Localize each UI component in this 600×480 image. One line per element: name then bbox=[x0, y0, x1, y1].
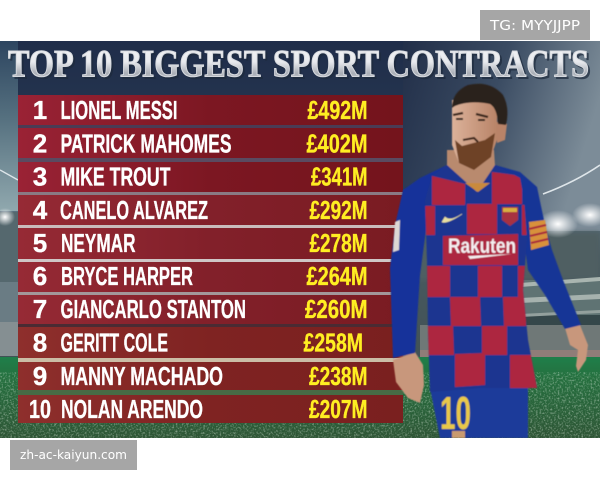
row 10 bbox=[18, 394, 403, 424]
watermark: telegram: TG: MYYJJPP bbox=[489, 19, 580, 34]
club crest bbox=[502, 207, 518, 226]
nike logo bbox=[442, 214, 462, 222]
neck bbox=[447, 150, 495, 192]
row 6: £264M bbox=[306, 261, 368, 291]
row 2 bbox=[18, 128, 403, 158]
shirt bbox=[424, 165, 538, 392]
row 10: NOLAN ARENDO bbox=[61, 394, 203, 424]
row 5 bbox=[18, 228, 403, 259]
collar bbox=[465, 183, 490, 192]
row 5: £278M bbox=[310, 228, 368, 258]
watermark: site bbox=[10, 440, 137, 470]
row separators bbox=[18, 125, 403, 395]
row 9: 9 bbox=[33, 361, 47, 391]
row 4: 4 bbox=[33, 195, 48, 225]
left sleeve bbox=[390, 165, 447, 358]
row 2: PATRICK MAHOMES bbox=[60, 128, 232, 158]
left hand bbox=[393, 352, 424, 403]
row 9: MANNY MACHADO bbox=[60, 361, 223, 391]
shorts number 10: 10 bbox=[440, 387, 471, 439]
row 8: GERITT COLE bbox=[60, 328, 168, 358]
row 8: £258M bbox=[304, 328, 363, 358]
shorts crest bbox=[452, 431, 465, 438]
row 7: £260M bbox=[305, 294, 368, 324]
row 3: 3 bbox=[33, 162, 47, 192]
row 2: 2 bbox=[33, 128, 47, 158]
league badge bbox=[393, 220, 400, 252]
row 3: MIKE TROUT bbox=[60, 162, 171, 192]
sponsor: Rakuten: Rakuten bbox=[448, 235, 516, 258]
head bbox=[452, 84, 507, 170]
row 10: 10 bbox=[29, 394, 51, 424]
row 7: 7 bbox=[33, 294, 47, 324]
row 2: £402M bbox=[306, 128, 368, 158]
row 8: 8 bbox=[33, 328, 47, 358]
row 1 bbox=[18, 95, 403, 125]
right hand bbox=[565, 325, 588, 372]
row 1: £492M bbox=[308, 95, 368, 125]
row 10: £207M bbox=[309, 394, 368, 424]
watermark: telegram bbox=[480, 10, 590, 40]
row 4: CANELO ALVAREZ bbox=[60, 195, 208, 225]
row 9 bbox=[18, 361, 403, 391]
watermark: site: zh-ac-kaiyun.com bbox=[20, 447, 127, 462]
ranking table bbox=[18, 95, 403, 424]
row 1: 1 bbox=[33, 95, 47, 125]
footballer portrait bbox=[390, 84, 588, 439]
shorts bbox=[430, 386, 528, 438]
row 7: GIANCARLO STANTON bbox=[60, 294, 246, 324]
row 1: LIONEL MESSI bbox=[60, 95, 178, 125]
row 9: £238M bbox=[309, 361, 368, 391]
row 6: 6 bbox=[33, 261, 47, 291]
row 5: 5 bbox=[33, 228, 47, 258]
row 4: £292M bbox=[310, 195, 368, 225]
row 6 bbox=[18, 261, 403, 292]
row 3 bbox=[18, 162, 403, 192]
right sleeve bbox=[495, 165, 581, 329]
row 3: £341M bbox=[311, 162, 368, 192]
row 5: NEYMAR bbox=[61, 228, 136, 258]
captain armband bbox=[529, 220, 549, 250]
row 4 bbox=[18, 195, 403, 225]
row 8 bbox=[18, 327, 403, 358]
row 6: BRYCE HARPER bbox=[61, 261, 193, 291]
